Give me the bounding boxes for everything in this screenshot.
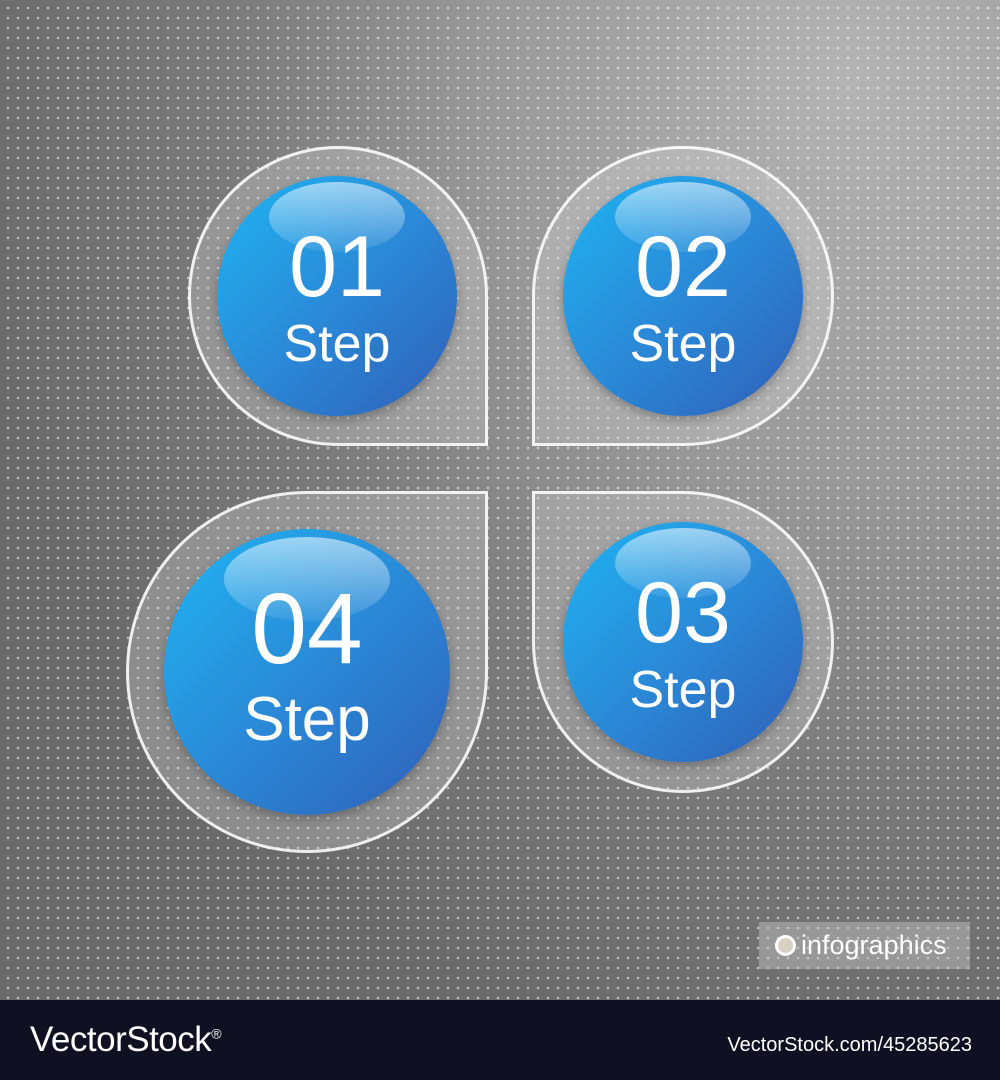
circle: 04 Step: Step	[243, 685, 371, 754]
circle: 01 Step	[217, 176, 457, 416]
circle: 02 Step: 02	[635, 219, 731, 315]
circle: 04 Step	[164, 529, 450, 815]
panel: step 02	[532, 146, 834, 446]
circle: 01 Step: 01	[289, 219, 385, 315]
badge: infographics	[759, 922, 970, 969]
badge: infographics: infographics	[801, 930, 947, 960]
circle: 03 Step: 03	[635, 565, 731, 661]
circle: 03 Step	[563, 522, 803, 762]
circle: 04 Step: 04	[251, 573, 363, 685]
footer: url: VectorStock.com/45285623	[727, 1034, 972, 1056]
circle: 02 Step: Step	[630, 315, 736, 373]
panel: step 01	[188, 146, 488, 446]
circle: 03 Step: Step	[630, 661, 736, 719]
panel: step 03	[532, 491, 834, 793]
panel: step 04	[126, 491, 488, 853]
circle: 01 Step: Step	[284, 315, 390, 373]
footer: VectorStock logo: VectorStock®	[30, 1020, 221, 1059]
circle: 02 Step	[563, 176, 803, 416]
